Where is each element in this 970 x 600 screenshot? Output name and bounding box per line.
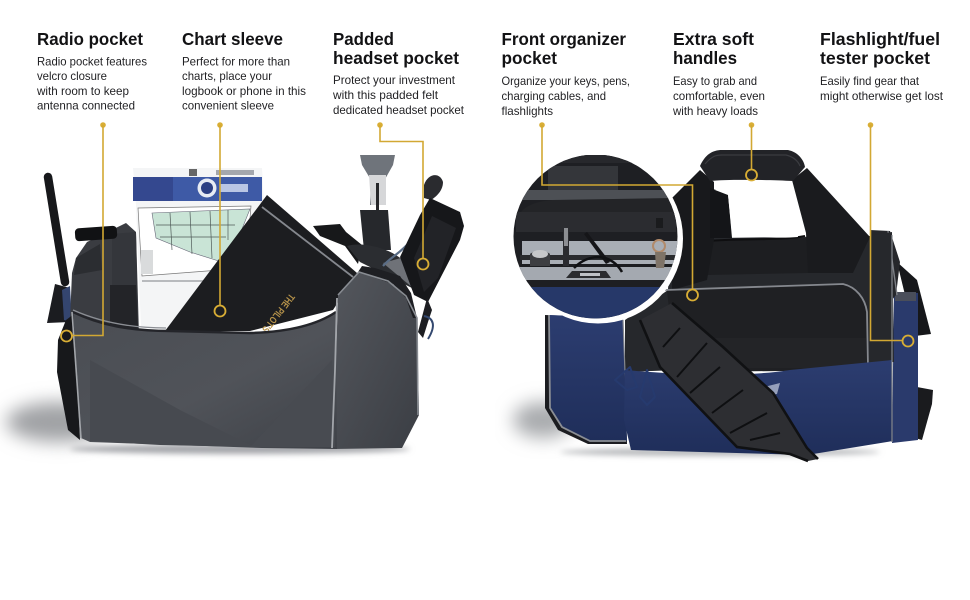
shadow — [513, 402, 573, 438]
illustration: grey bag with chart, logbook and headset — [6, 155, 464, 454]
heading: padded headset pocket — [332, 29, 465, 117]
heading: front organizer pocket — [502, 29, 630, 118]
front pocket — [73, 312, 337, 449]
heading: padded headset pocket: Padded — [333, 29, 394, 49]
illustration: navy and black bag — [513, 150, 933, 461]
heading: chart sleeve: Perfect for more than — [182, 54, 290, 68]
heading: flashlight fuel tester pocket: might otherwise get lost — [820, 89, 944, 103]
shoulder strap — [640, 303, 818, 461]
callout line: handles — [746, 122, 757, 180]
heading: front organizer pocket: pocket — [502, 48, 557, 68]
handle pad — [700, 150, 805, 181]
heading: front organizer pocket: Organize your keys, pens, — [502, 74, 630, 88]
heading: extra soft handles: Extra soft — [673, 29, 754, 49]
heading: extra soft handles: Easy to grab and — [673, 74, 757, 88]
callout line: flashlight pocket — [868, 122, 914, 346]
heading: extra soft handles: with heavy loads — [672, 104, 758, 118]
PILOT text on logbook: THE PILOT'S — [259, 291, 296, 334]
front black pocket — [667, 285, 868, 372]
heading: chart sleeve: charts, place your — [182, 69, 272, 83]
heading: chart sleeve: Chart sleeve — [182, 29, 283, 49]
icon: carabiners — [615, 367, 655, 405]
heading: front organizer pocket: flashlights — [502, 104, 553, 118]
heading: radio pocket: antenna connected — [37, 98, 135, 112]
heading: flashlight fuel tester pocket: tester pocket — [820, 48, 930, 68]
callout: magnified organizer pocket — [513, 154, 685, 325]
heading: padded headset pocket: dedicated headset pocket — [333, 103, 465, 117]
heading: radio pocket — [36, 29, 147, 112]
heading: padded headset pocket: with this padded felt — [332, 88, 439, 102]
heading: radio pocket: Radio pocket — [37, 29, 143, 49]
heading: radio pocket: with room to keep — [36, 84, 129, 98]
heading: front organizer pocket: charging cables, and — [502, 89, 606, 103]
handle straps — [672, 168, 870, 290]
heading: extra soft handles: handles — [673, 48, 737, 68]
logbook — [165, 195, 357, 334]
side panel — [333, 272, 419, 449]
heading: chart sleeve: logbook or phone in this — [182, 84, 306, 98]
black compartment — [625, 180, 894, 372]
side navy pocket — [892, 292, 918, 443]
callout line: headset pocket — [377, 122, 428, 270]
callout line: front organizer — [539, 122, 698, 300]
heading: extra soft handles — [672, 29, 765, 118]
bag rear section — [70, 223, 139, 335]
left end of bag — [57, 314, 80, 440]
heading: padded headset pocket: Protect your investment — [333, 73, 456, 87]
heading: flashlight fuel tester pocket: Easily find gear that — [820, 74, 920, 88]
heading: flashlight fuel tester pocket: Flashlight/fuel — [820, 29, 940, 49]
heading: extra soft handles: comfortable, even — [673, 89, 765, 103]
shadow — [6, 402, 110, 442]
heading: chart sleeve: convenient sleeve — [182, 98, 274, 112]
heading: flashlight fuel tester pocket — [820, 29, 944, 103]
heading: front organizer pocket: Front organizer — [502, 29, 626, 49]
callout line: radio pocket — [61, 122, 106, 342]
white handle window — [715, 190, 798, 238]
icon: radio antenna — [47, 177, 72, 323]
headset pocket — [400, 198, 464, 302]
rear far-side strap and flap — [897, 262, 931, 336]
chart sleeve paper — [133, 168, 264, 330]
heading: radio pocket: velcro closure — [37, 69, 107, 83]
icon: headset — [313, 155, 443, 288]
heading: padded headset pocket: headset pocket — [333, 48, 459, 68]
heading: radio pocket: Radio pocket features — [37, 54, 147, 68]
navy lower pocket — [624, 360, 893, 455]
heading: chart sleeve — [182, 29, 306, 112]
callout line: chart sleeve — [214, 122, 226, 316]
left navy side — [545, 315, 627, 444]
